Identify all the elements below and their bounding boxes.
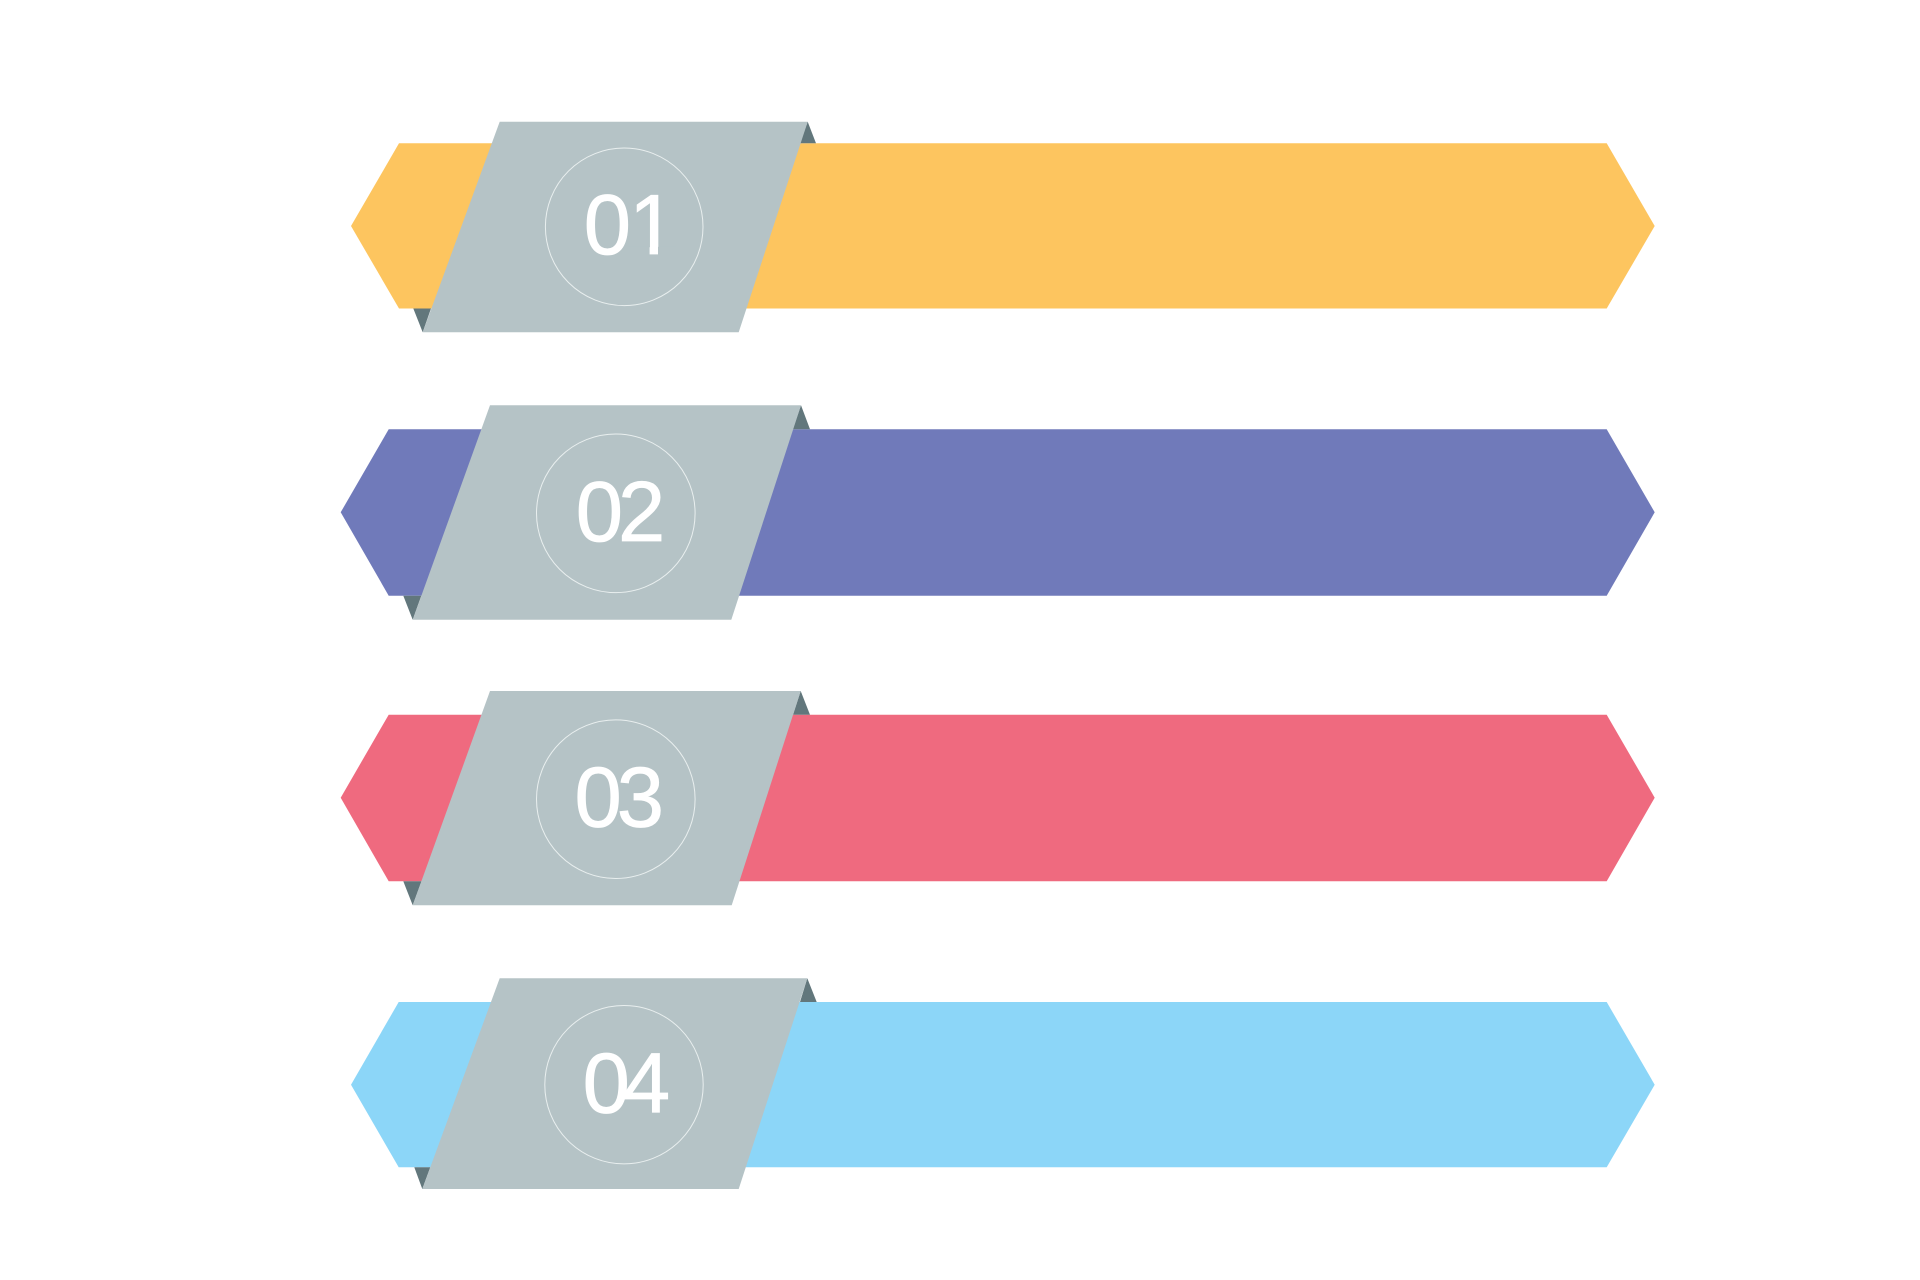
fold shadow bottom <box>414 1167 430 1189</box>
number 02: 02 <box>576 465 661 560</box>
fold shadow top <box>793 405 810 429</box>
panel: banner 03 <box>341 691 1655 905</box>
fold shadow top <box>793 691 810 715</box>
number ring <box>536 434 695 593</box>
fold shadow bottom <box>413 308 431 332</box>
fold shadow bottom <box>403 596 421 620</box>
fold shadow top <box>800 978 817 1002</box>
number 04: 04 <box>583 1036 668 1131</box>
number ring <box>545 148 703 306</box>
number ring <box>545 1005 703 1164</box>
fold shadow top <box>800 122 816 143</box>
yellow hexagonal bar <box>351 143 1655 308</box>
number ring <box>536 720 695 878</box>
panel: banner 01 <box>351 122 1655 332</box>
number 03: 03 <box>574 751 661 846</box>
fold shadow bottom <box>403 881 422 905</box>
grey parallelogram badge <box>413 405 801 620</box>
grey parallelogram badge <box>413 691 801 905</box>
panel: banner 04 <box>351 978 1655 1189</box>
purple hexagonal bar <box>341 429 1655 596</box>
grey parallelogram badge <box>423 122 808 332</box>
blue hexagonal bar <box>351 1002 1655 1167</box>
number 01: 01 <box>584 178 674 273</box>
grey parallelogram badge <box>422 978 807 1189</box>
panel: banner 02 <box>341 405 1655 620</box>
pink hexagonal bar <box>341 715 1655 881</box>
